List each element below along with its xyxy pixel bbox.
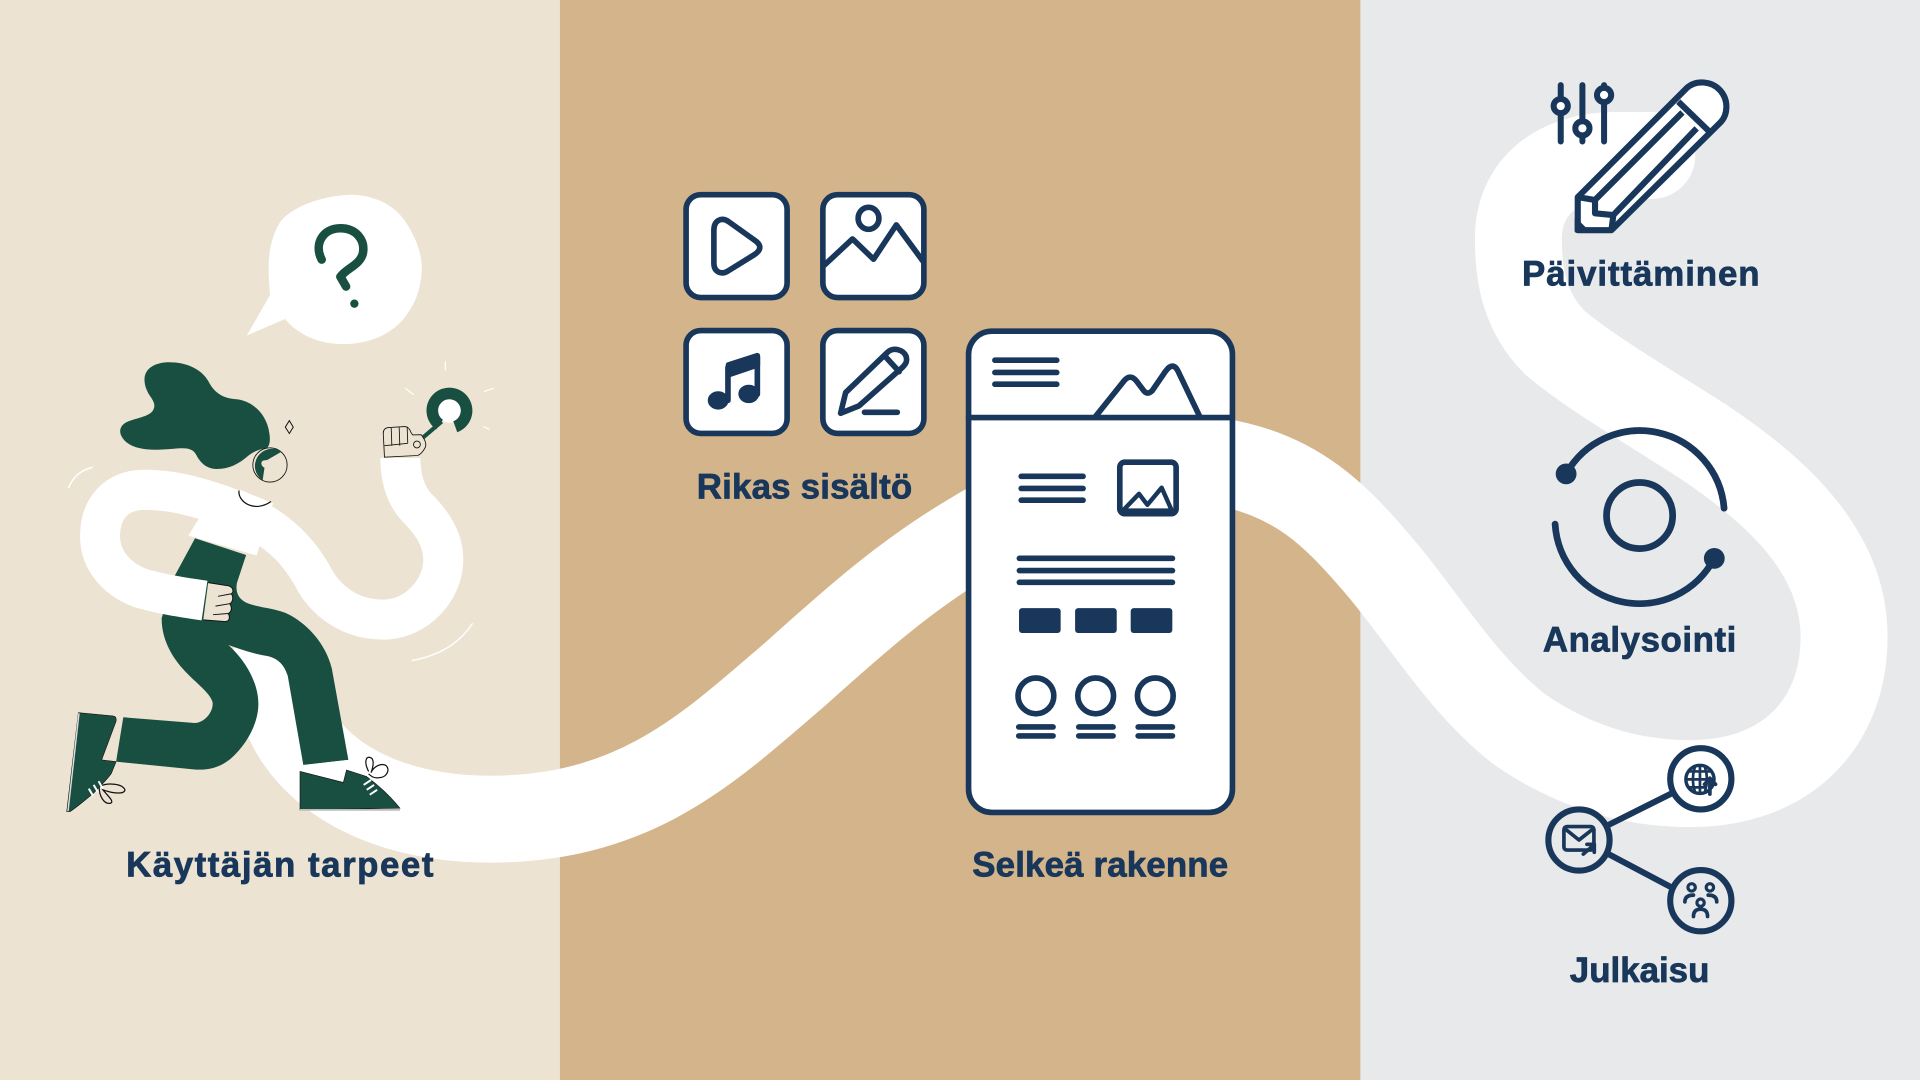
- motion lines: [68, 467, 473, 661]
- connector lines: [1608, 793, 1671, 887]
- label: clear structure: Selkeä rakenne: [972, 846, 1228, 885]
- node: globe upload: [1670, 748, 1731, 809]
- page outline: [969, 331, 1232, 812]
- icon: large pencil: [1576, 82, 1726, 231]
- network: publishing channels: [1548, 748, 1731, 931]
- long white arm: [100, 458, 443, 620]
- three buttons: [1019, 608, 1172, 633]
- panel: maintenance background: [1360, 0, 1920, 1080]
- label: rich content: Rikas sisältö: [697, 467, 912, 506]
- label: user needs: Käyttäjän tarpeet: [126, 846, 434, 885]
- image placeholder: [1120, 462, 1176, 514]
- front sock: [303, 760, 348, 782]
- header divider and mountain: [969, 366, 1232, 418]
- speech bubble with question mark: [247, 195, 422, 344]
- waist hand: [203, 583, 233, 622]
- key: [418, 393, 467, 442]
- sparkle: [285, 421, 293, 433]
- body text lines: [1021, 476, 1083, 500]
- fist holding key: [383, 393, 467, 457]
- hair: [120, 362, 270, 469]
- panel: user needs background: [0, 0, 560, 1080]
- panel: content background: [560, 0, 1360, 1080]
- icon: sliders: [1554, 85, 1611, 142]
- label: publishing: Julkaisu: [1570, 951, 1709, 990]
- icon: pencil: [823, 331, 924, 433]
- illustration: running person: [67, 195, 494, 812]
- back shoe: [67, 713, 125, 812]
- wireframe phone page: [969, 331, 1232, 812]
- three circles with captions: [1018, 678, 1173, 736]
- paragraph lines: [1019, 558, 1172, 582]
- icon: video play: [686, 195, 787, 298]
- back foot ankle: [102, 719, 120, 762]
- header menu lines: [995, 360, 1057, 384]
- smile: [239, 491, 271, 506]
- node: email: [1548, 809, 1610, 871]
- label: updating: Päivittäminen: [1522, 254, 1760, 293]
- icon: image: [823, 195, 924, 298]
- white winding ribbon: [276, 156, 1844, 819]
- icon: analytics cycle: [1555, 431, 1725, 604]
- label: analysis: Analysointi: [1543, 620, 1736, 659]
- front shoe: [300, 757, 400, 810]
- torso and trousers: [116, 538, 348, 770]
- node: people: [1670, 870, 1731, 931]
- icon grid: rich content: [686, 195, 924, 433]
- shirt: [188, 490, 273, 556]
- face with ear: [253, 448, 287, 482]
- icon: music note: [686, 331, 787, 433]
- key sparks: [405, 362, 494, 429]
